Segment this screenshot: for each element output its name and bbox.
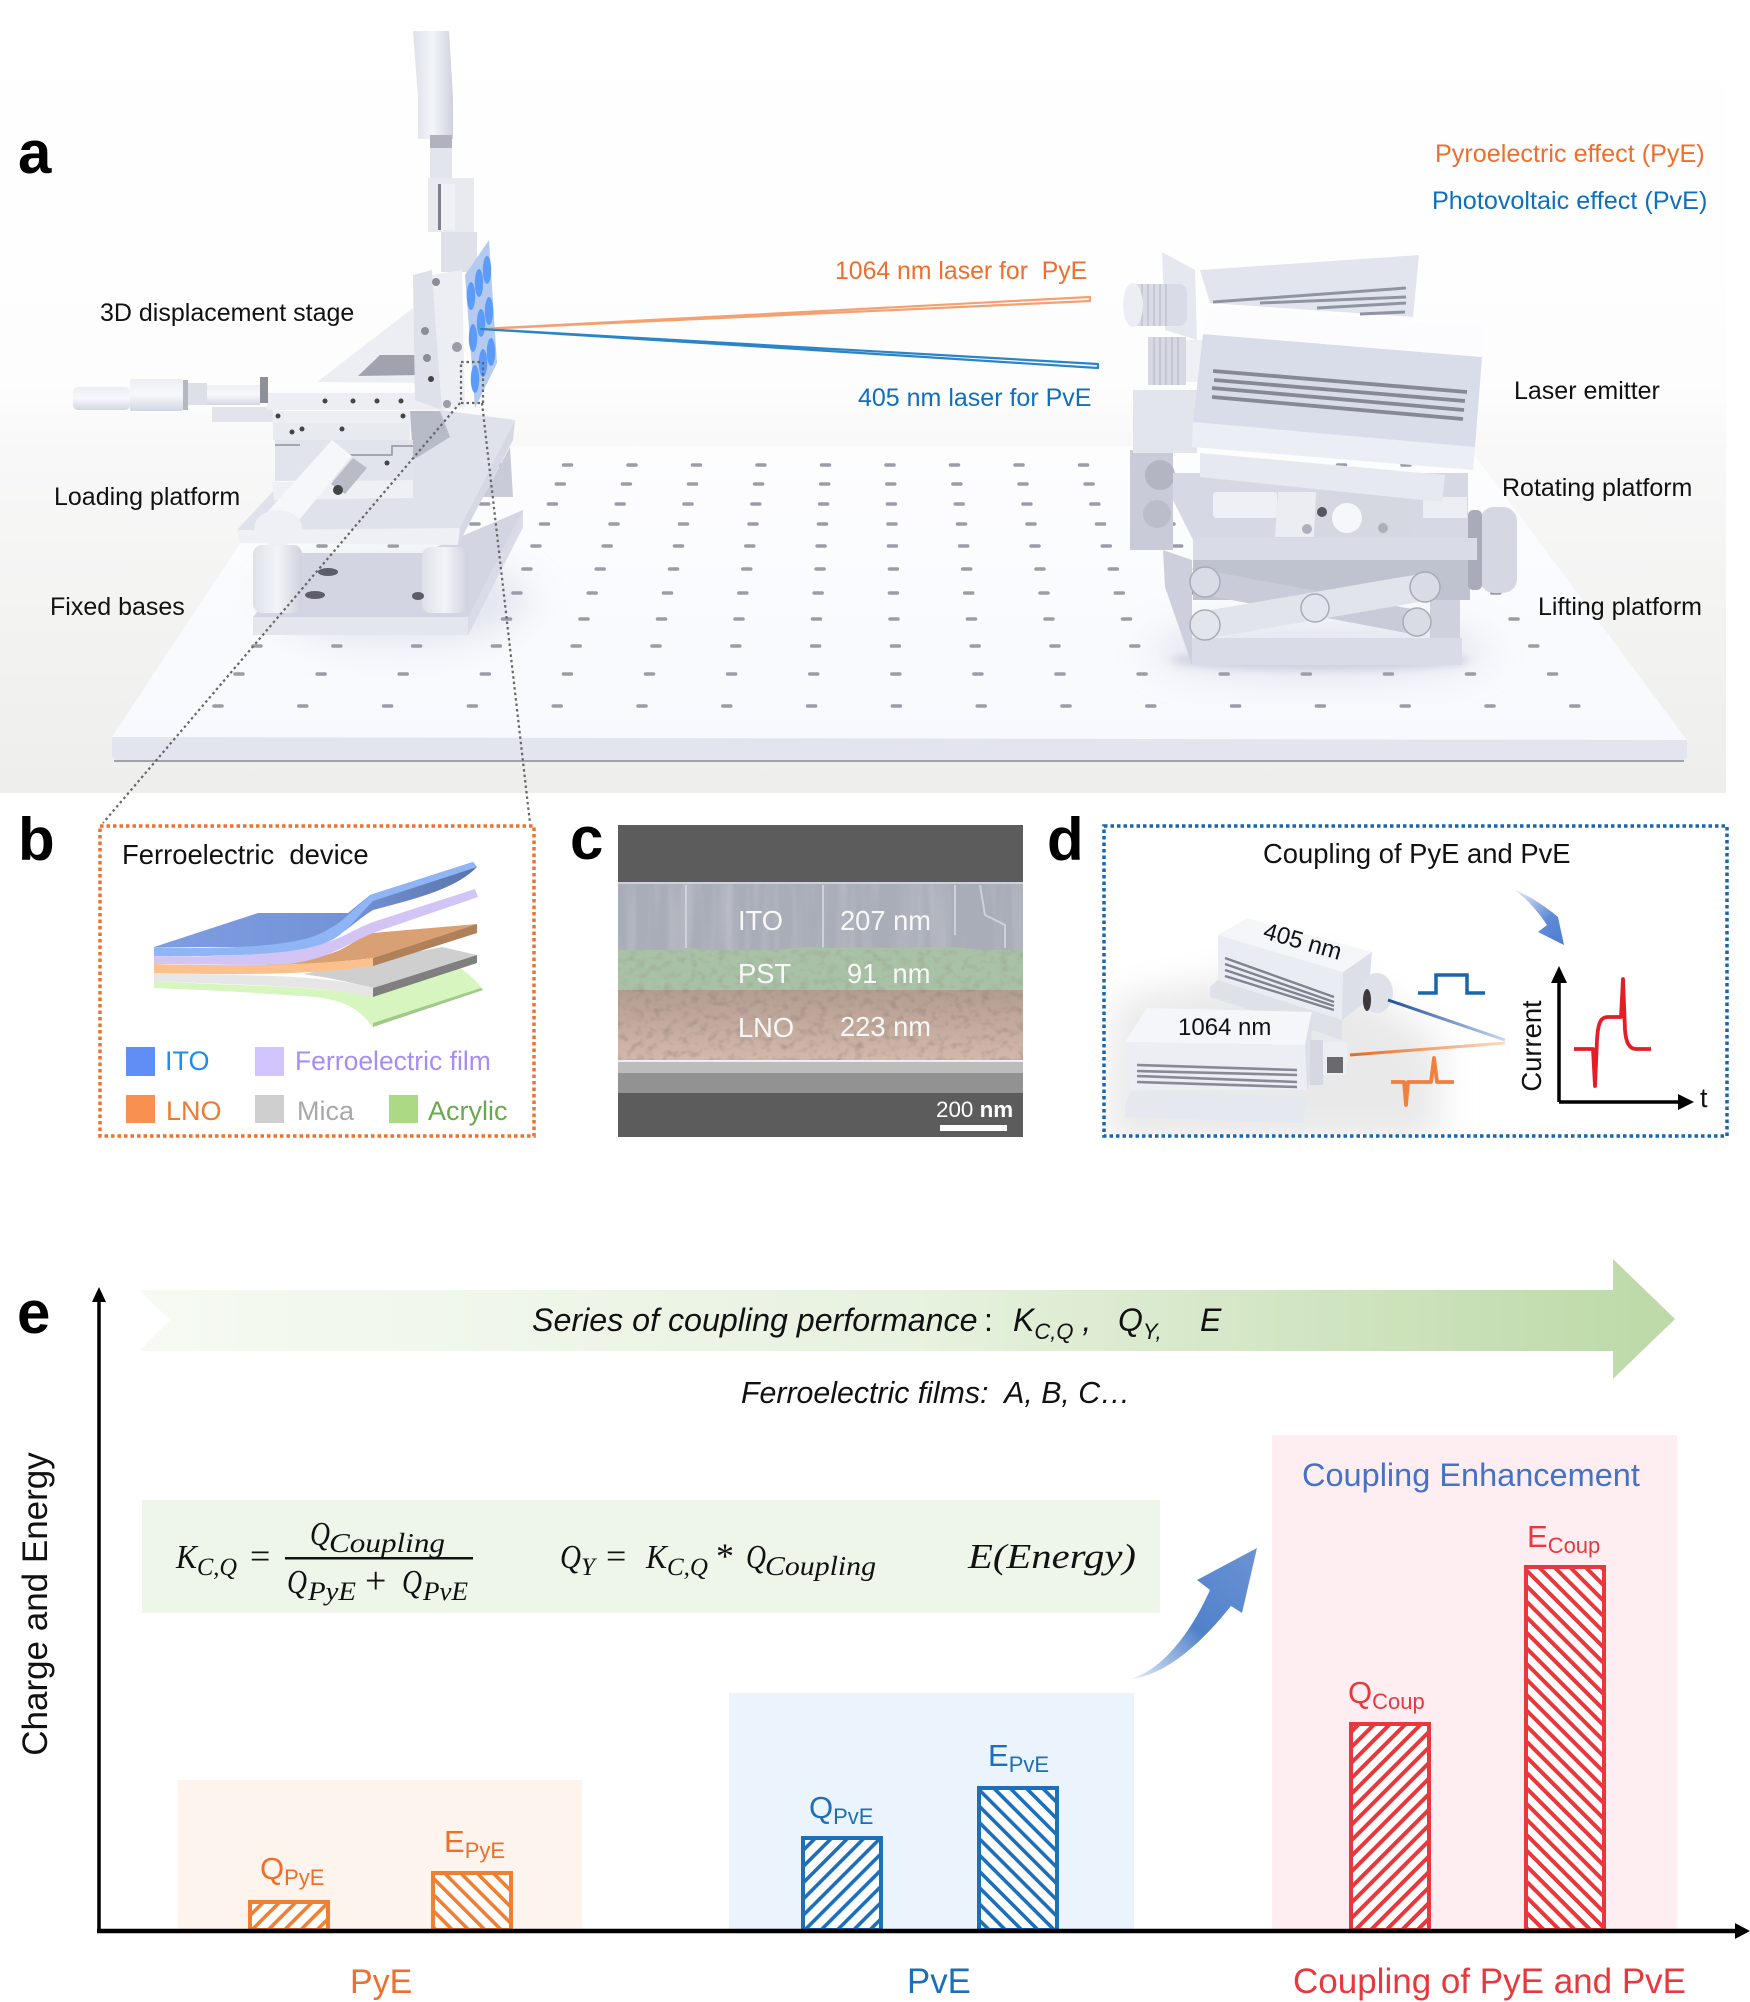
formula box: PvE bbox=[422, 1577, 468, 1606]
title: ferroelectric device: Ferroelectric device bbox=[122, 839, 369, 870]
axis label: t: t bbox=[1700, 1083, 1708, 1113]
label: E coupling: Coup bbox=[1548, 1533, 1600, 1558]
panel label a: a bbox=[18, 119, 52, 186]
laser beams bbox=[481, 297, 1098, 368]
blue rising arrow bbox=[1131, 1548, 1257, 1679]
3D displacement stage and mounts bbox=[73, 31, 523, 635]
optical breadboard plate bbox=[112, 446, 1687, 762]
formula box: Q bbox=[746, 1539, 766, 1576]
formula box: Q bbox=[310, 1516, 330, 1553]
panel d: coupling of PyE and PvE bbox=[1047, 806, 1727, 1145]
layered device illustration bbox=[154, 862, 483, 1027]
label: 1064 nm: 1064 nm bbox=[1178, 1014, 1271, 1041]
label: photovoltaic effect: Photovoltaic effect (PvE) bbox=[1432, 187, 1707, 215]
panel c: SEM cross-section: c bbox=[570, 805, 603, 872]
label: laser emitter: Laser emitter bbox=[1514, 377, 1660, 405]
series heading: : bbox=[984, 1302, 993, 1338]
layer labels bbox=[738, 905, 931, 1043]
label: Q PvE: Q bbox=[809, 1790, 833, 1825]
series heading: Y, bbox=[1143, 1319, 1162, 1344]
chart axes bbox=[92, 1287, 1750, 1939]
label: Q coupling: Q bbox=[1348, 1675, 1372, 1710]
label: loading platform: Loading platform bbox=[54, 483, 240, 511]
series heading bbox=[532, 1302, 1222, 1344]
label: 1064 nm laser: 1064 nm laser for PyE bbox=[835, 258, 1087, 285]
label: 3D displacement stage: 3D displacement stage bbox=[100, 299, 354, 327]
layer labels: 223 nm bbox=[840, 1011, 931, 1042]
label: E coupling: E bbox=[1527, 1519, 1548, 1554]
layer labels: ITO bbox=[738, 905, 783, 936]
series heading: E bbox=[1200, 1302, 1222, 1338]
formula box: Q bbox=[402, 1564, 422, 1601]
formula box: * bbox=[716, 1536, 734, 1576]
orange spike signal bbox=[1391, 1058, 1454, 1105]
formula box: Q bbox=[560, 1539, 581, 1576]
formula box: C,Q bbox=[667, 1554, 708, 1581]
bar: E coupling bbox=[1526, 1567, 1604, 1930]
bar: Q PyE bbox=[250, 1902, 328, 1930]
group background: PyE bbox=[178, 1780, 582, 1930]
formula box: K bbox=[175, 1539, 199, 1576]
blue curved arrow bbox=[1513, 889, 1564, 945]
series heading: , bbox=[1073, 1302, 1091, 1338]
bar: Q PvE bbox=[803, 1838, 881, 1930]
panel b: ferroelectric device: b bbox=[18, 806, 55, 873]
series heading: Series of coupling performance bbox=[532, 1302, 978, 1338]
dotted zoom lines to device bbox=[103, 362, 530, 823]
y axis label: Charge and Energy bbox=[16, 1452, 55, 1756]
legend: materials: ITO bbox=[165, 1046, 210, 1076]
laser system: emitters, rotating and lifting platforms bbox=[1123, 252, 1517, 670]
panel e: coupling enhancement chart bbox=[16, 1259, 1750, 2001]
label: Q PvE: PvE bbox=[833, 1804, 873, 1829]
series heading: C,Q bbox=[1034, 1319, 1073, 1344]
label: lifting platform: Lifting platform bbox=[1538, 593, 1702, 621]
panel b: ferroelectric device bbox=[18, 806, 534, 1136]
legend: materials bbox=[126, 1046, 508, 1126]
category label: coupling: Coupling of PyE and PvE bbox=[1293, 1962, 1686, 2001]
label: 405 nm: 405 nm bbox=[1260, 918, 1345, 966]
panel c: SEM cross-section bbox=[570, 805, 1023, 1137]
panel a: experimental setup bbox=[0, 0, 1726, 823]
layer labels: PST bbox=[738, 958, 791, 989]
label: E PvE: PvE bbox=[1009, 1752, 1049, 1777]
bar: E PyE bbox=[433, 1873, 511, 1930]
series arrow bbox=[139, 1259, 1675, 1379]
ferroelectric device on stage bbox=[465, 240, 497, 408]
panel e: coupling enhancement chart: e bbox=[17, 1279, 50, 1346]
legend: materials: Acrylic bbox=[428, 1096, 508, 1126]
coupling enhancement heading: Coupling Enhancement bbox=[1302, 1457, 1640, 1493]
formula box: Y bbox=[581, 1554, 598, 1581]
axis label: current: Current bbox=[1516, 1000, 1547, 1092]
label: pyroelectric effect: Pyroelectric effect (PyE) bbox=[1435, 140, 1705, 168]
label: E PvE: E bbox=[988, 1738, 1009, 1773]
scale bar: 200 nm bbox=[936, 1097, 1013, 1122]
label: E PyE: E bbox=[444, 1824, 465, 1859]
beams converging bbox=[1350, 1000, 1505, 1055]
formula box: PyE bbox=[307, 1577, 356, 1606]
blue square pulse bbox=[1418, 975, 1485, 993]
formula box bbox=[142, 1500, 1160, 1613]
label: Q PyE: PyE bbox=[284, 1865, 324, 1890]
laser emitters illustration bbox=[1106, 918, 1440, 1145]
label: E PyE: PyE bbox=[465, 1838, 505, 1863]
formula box: + bbox=[365, 1560, 386, 1602]
formula box: Coupling bbox=[765, 1551, 876, 1581]
bar: Q coupling bbox=[1351, 1724, 1429, 1930]
panel d: coupling of PyE and PvE: d bbox=[1047, 806, 1084, 873]
formula box: C,Q bbox=[197, 1554, 237, 1581]
label: Q PyE: Q bbox=[260, 1851, 284, 1886]
formula box: Coupling bbox=[329, 1528, 445, 1558]
formula box: K bbox=[645, 1539, 669, 1576]
bar: E PvE bbox=[979, 1788, 1057, 1930]
formula box: Q bbox=[287, 1564, 307, 1601]
title: Coupling of PyE and PvE bbox=[1263, 838, 1571, 869]
legend: materials: LNO bbox=[166, 1096, 222, 1126]
layer labels: 91 nm bbox=[847, 958, 930, 989]
label: Q coupling: Coup bbox=[1372, 1689, 1425, 1714]
category label: PvE: PvE bbox=[907, 1962, 971, 2001]
series heading: K bbox=[1013, 1302, 1034, 1338]
group background: PvE bbox=[729, 1693, 1134, 1930]
ferroelectric films text: Ferroelectric films: A, B, C… bbox=[741, 1377, 1130, 1410]
formula box: = bbox=[250, 1536, 270, 1576]
label: fixed bases: Fixed bases bbox=[50, 593, 185, 621]
formula box: = bbox=[606, 1536, 626, 1576]
legend: materials: Mica bbox=[297, 1096, 355, 1126]
label: rotating platform: Rotating platform bbox=[1502, 474, 1692, 502]
label: 405 nm laser: 405 nm laser for PvE bbox=[858, 384, 1091, 412]
category label: PyE: PyE bbox=[350, 1963, 412, 2001]
current vs time plot bbox=[1516, 966, 1708, 1113]
formula box: E(Energy) bbox=[967, 1537, 1136, 1576]
layer labels: 207 nm bbox=[840, 905, 931, 936]
series heading: Q bbox=[1118, 1302, 1143, 1338]
legend: materials: Ferroelectric film bbox=[295, 1046, 491, 1076]
layer labels: LNO bbox=[738, 1012, 794, 1043]
group background: coupling bbox=[1272, 1435, 1677, 1930]
